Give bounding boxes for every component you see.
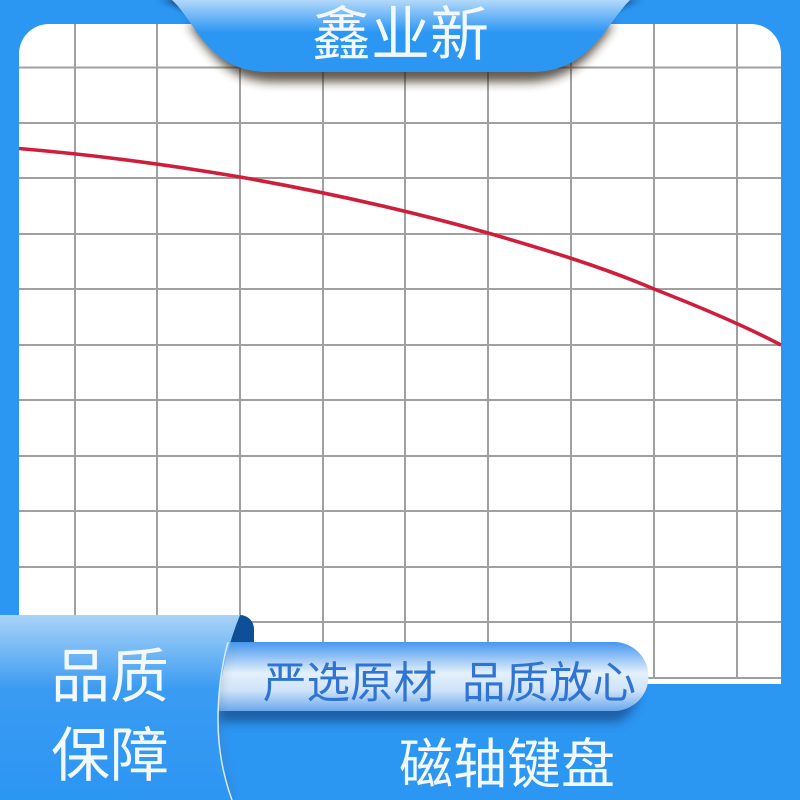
title: 鑫业新 — [312, 2, 489, 68]
pill shadow — [218, 660, 638, 722]
line chart: red curve — [19, 148, 781, 345]
panel: white chart area — [19, 24, 781, 684]
header banner — [172, 0, 630, 72]
dark blue tab — [228, 615, 254, 645]
side panel — [0, 615, 240, 800]
pill text: slogan: 严选原材 — [263, 660, 437, 708]
left header fold — [158, 0, 215, 25]
product name: 磁轴键盘 — [399, 735, 615, 795]
pill text: slogan: 品质放心 — [462, 660, 636, 708]
header banner shadow — [188, 24, 614, 82]
right header fold — [590, 0, 642, 25]
side label: quality: 品质 — [51, 644, 169, 710]
pill text: slogan — [263, 660, 636, 708]
side label: guarantee: 保障 — [51, 723, 169, 789]
pill banner — [218, 642, 648, 711]
side panel shadow — [212, 640, 234, 800]
